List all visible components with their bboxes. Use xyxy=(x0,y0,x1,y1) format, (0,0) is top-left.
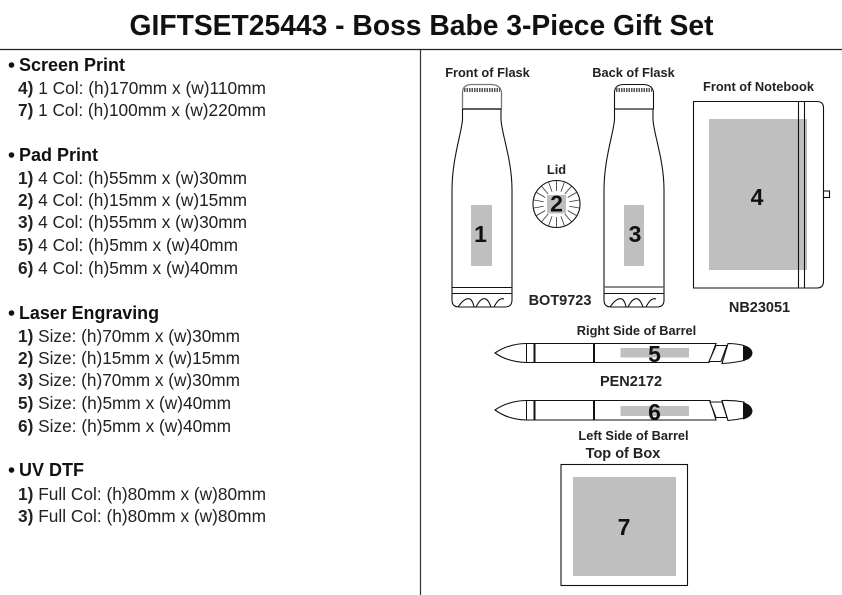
print area 5 xyxy=(620,348,689,358)
section: laser engraving xyxy=(9,303,240,436)
right barrel label: Right Side of Barrel xyxy=(577,323,696,338)
section: pad print: 2) 4 Col: (h)15mm x (w)15mm xyxy=(18,190,247,210)
section: uv dtf: UV DTF xyxy=(19,460,84,480)
section: laser engraving: 3) Size: (h)70mm x (w)30mm xyxy=(18,370,240,390)
icon: flask back xyxy=(604,84,664,307)
section: uv dtf: 1) Full Col: (h)80mm x (w)80mm xyxy=(18,484,266,504)
section: laser engraving: 1) Size: (h)70mm x (w)30mm xyxy=(18,326,240,346)
print area 4 xyxy=(709,119,807,270)
print area 6 xyxy=(620,406,689,416)
section: pad print: Pad Print xyxy=(19,145,98,165)
section: laser engraving: 6) Size: (h)5mm x (w)40mm xyxy=(18,416,231,436)
section: laser engraving: 5) Size: (h)5mm x (w)40mm xyxy=(18,393,231,413)
section: screen print: 4) 1 Col: (h)170mm x (w)110mm xyxy=(18,78,266,98)
number 5: 5 xyxy=(648,341,661,367)
flask back label: Back of Flask xyxy=(592,65,676,80)
section: uv dtf: 3) Full Col: (h)80mm x (w)80mm xyxy=(18,506,266,526)
notebook label: Front of Notebook xyxy=(703,79,815,94)
print area 1 xyxy=(471,205,492,266)
bot code: BOT9723 xyxy=(529,293,591,309)
number 2: 2 xyxy=(550,190,563,216)
print area 3 xyxy=(624,205,644,266)
section: pad print: 5) 4 Col: (h)5mm x (w)40mm xyxy=(18,235,238,255)
icon: lid xyxy=(533,180,580,228)
icon: box xyxy=(561,464,688,586)
panel: print methods xyxy=(9,55,266,526)
print area 2 xyxy=(547,195,566,214)
section: uv dtf xyxy=(9,460,266,526)
section: pad print: 6) 4 Col: (h)5mm x (w)40mm xyxy=(18,258,238,278)
section: pad print: 1) 4 Col: (h)55mm x (w)30mm xyxy=(18,168,247,188)
section: screen print: Screen Print xyxy=(19,55,125,75)
flask front label: Front of Flask xyxy=(445,65,531,80)
section: pad print xyxy=(9,145,247,278)
number 1: 1 xyxy=(474,221,487,247)
section: laser engraving: 2) Size: (h)15mm x (w)15mm xyxy=(18,348,240,368)
icon: flask front xyxy=(452,84,512,307)
left barrel label: Left Side of Barrel xyxy=(578,428,689,443)
print area 7 xyxy=(573,477,676,576)
icon: notebook xyxy=(694,101,830,288)
number 3: 3 xyxy=(629,221,641,247)
number 4: 4 xyxy=(751,184,764,210)
box label: Top of Box xyxy=(586,446,660,462)
pen code: PEN2172 xyxy=(600,374,662,390)
section: pad print: 3) 4 Col: (h)55mm x (w)30mm xyxy=(18,212,247,232)
icon: pen left side xyxy=(495,399,752,425)
icon: pen right side xyxy=(495,341,752,367)
number 7: 7 xyxy=(618,514,630,540)
lid label: Lid xyxy=(547,162,566,177)
notebook code: NB23051 xyxy=(729,300,790,316)
section: laser engraving: Laser Engraving xyxy=(19,303,159,323)
number 6: 6 xyxy=(648,399,661,425)
title: GIFTSET25443 - Boss Babe 3-Piece Gift Set xyxy=(130,10,714,42)
section: screen print xyxy=(9,55,266,120)
section: screen print: 7) 1 Col: (h)100mm x (w)220mm xyxy=(18,100,266,120)
